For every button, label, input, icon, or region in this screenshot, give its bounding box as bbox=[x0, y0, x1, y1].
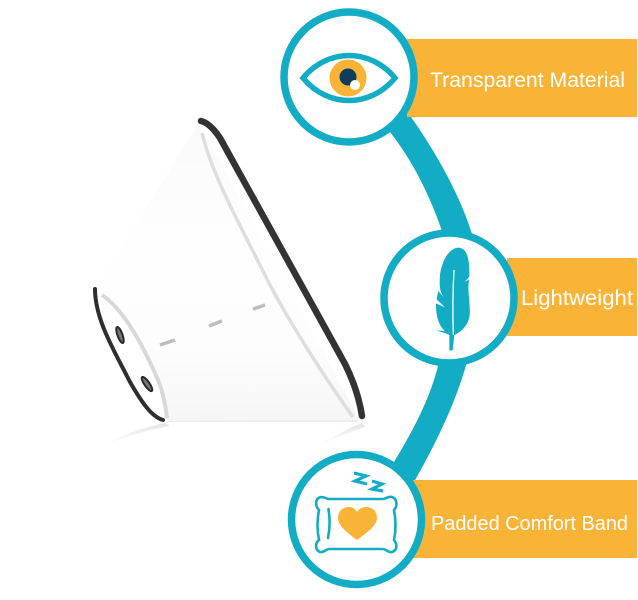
connecting arc bbox=[390, 113, 472, 482]
icon: heart bbox=[338, 507, 377, 540]
label band: Transparent Material bbox=[407, 39, 637, 117]
label band: Lightweight bbox=[507, 258, 637, 336]
floor reflection bbox=[104, 421, 365, 446]
product: transparent cone collar bbox=[95, 121, 365, 446]
icon: feather bbox=[436, 248, 470, 350]
slot bottom bbox=[140, 376, 154, 392]
small rim interior bbox=[95, 289, 165, 420]
icon: eye bbox=[303, 56, 395, 100]
dash marks bbox=[160, 305, 265, 345]
icon: pillow bbox=[316, 473, 396, 552]
label band: Padded Comfort Band bbox=[413, 480, 637, 558]
badge: feather bbox=[384, 233, 514, 363]
inner band of wide rim bbox=[202, 133, 353, 417]
label band: Padded Comfort Band: Padded Comfort Band bbox=[431, 513, 628, 535]
small dark rim bbox=[95, 289, 163, 420]
label band: Lightweight: Lightweight bbox=[521, 287, 633, 310]
inner band of small rim bbox=[102, 295, 167, 418]
icon: sleep letters bbox=[354, 473, 383, 491]
label band: Transparent Material: Transparent Material bbox=[430, 69, 625, 92]
slot top bbox=[115, 326, 125, 344]
badge: pillow bbox=[292, 454, 422, 584]
wide dark rim bbox=[201, 121, 362, 416]
badge: eye bbox=[284, 12, 414, 142]
cone body bbox=[96, 124, 360, 421]
